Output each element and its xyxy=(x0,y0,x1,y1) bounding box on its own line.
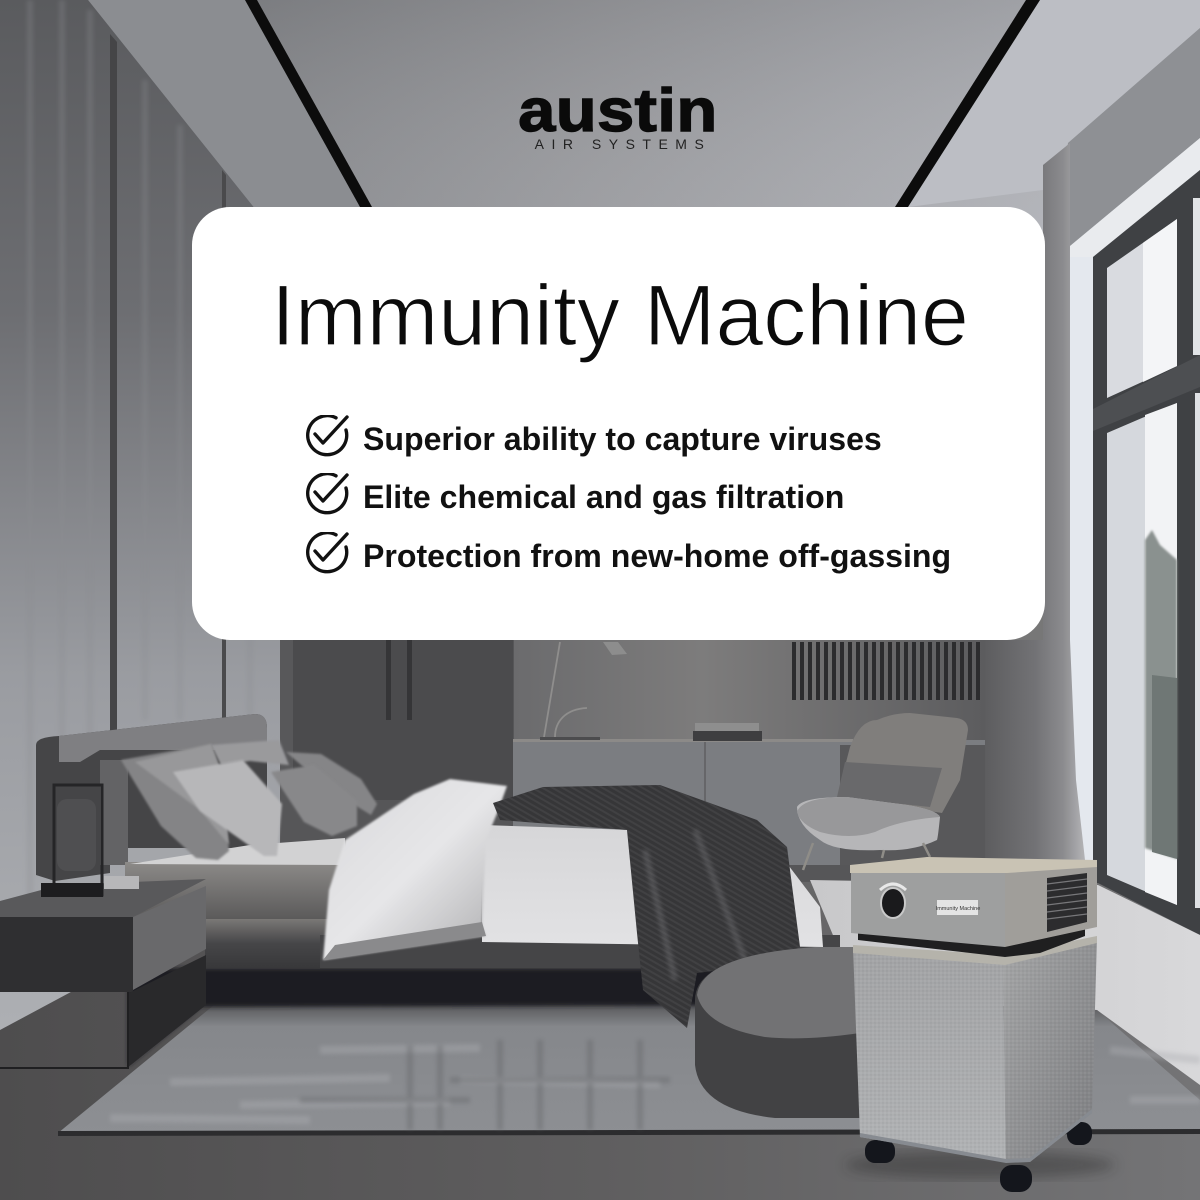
logo: AIR SYSTEMS xyxy=(535,136,711,152)
throw blanket xyxy=(493,785,800,1028)
panel: white features card xyxy=(192,207,1045,640)
ceiling xyxy=(0,0,1200,260)
purifier neck xyxy=(858,926,1085,957)
curtain xyxy=(985,143,1085,860)
back pillows xyxy=(286,752,377,815)
bed xyxy=(36,714,840,1028)
purifier top unit xyxy=(850,857,1097,947)
mattress and base xyxy=(125,862,340,919)
icon: Austin air purifier xyxy=(850,857,1097,1192)
armchair xyxy=(797,713,968,870)
right wall and windows xyxy=(1068,28,1200,935)
feature: off-gassing protection: Protection from new-home off-gassing xyxy=(363,538,951,574)
purifier base body xyxy=(853,936,1097,1163)
title: Immunity Machine xyxy=(271,268,969,364)
icon: check mark circle xyxy=(306,473,349,514)
feature: capture viruses: Superior ability to capture viruses xyxy=(363,421,882,457)
duvet xyxy=(323,779,507,960)
logo: austin xyxy=(518,77,718,144)
pillow right xyxy=(271,765,357,836)
ottoman xyxy=(695,947,860,1118)
nightstand and lamp xyxy=(0,785,206,1068)
shadow under bed xyxy=(128,968,860,1066)
purifier top unit: Immunity Machine xyxy=(936,906,980,912)
sheet xyxy=(482,825,823,947)
floor xyxy=(0,880,1200,1200)
icon: check mark circle xyxy=(306,415,349,456)
air purifier shadow xyxy=(845,1151,1115,1179)
lamp xyxy=(41,785,139,897)
pillow front xyxy=(173,760,282,856)
headboard xyxy=(36,714,267,881)
left wall panels xyxy=(0,0,280,1040)
pillow left xyxy=(121,744,229,860)
bright floor near window xyxy=(810,880,1200,1085)
icon: check mark circle xyxy=(306,532,349,574)
rug xyxy=(58,1000,1200,1136)
purifier wheels xyxy=(865,1122,1092,1192)
feature: chemical and gas filtration: Elite chemical and gas filtration xyxy=(363,479,844,515)
back wall and cabinets xyxy=(280,640,1000,890)
